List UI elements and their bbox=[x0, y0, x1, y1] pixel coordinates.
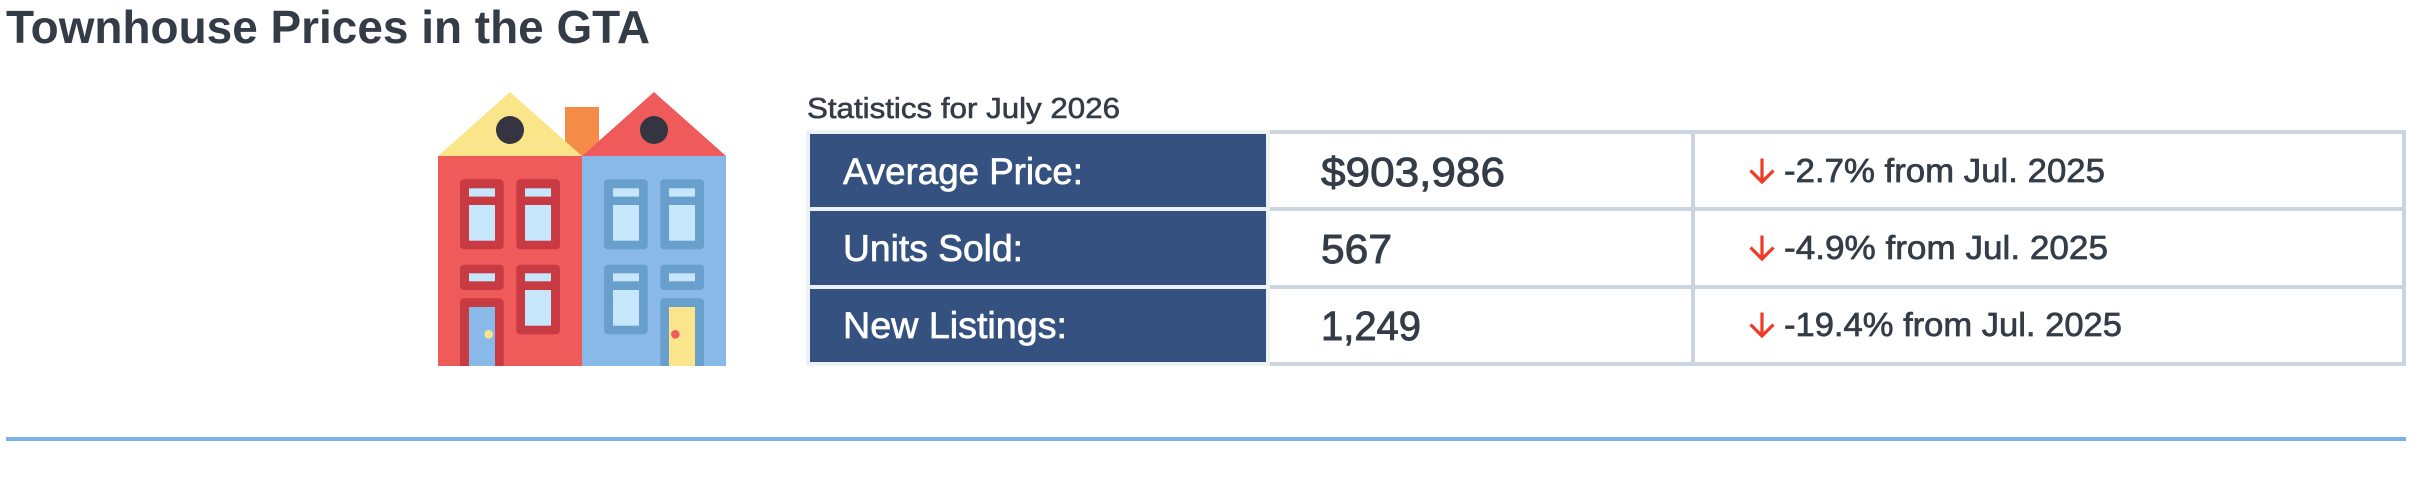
row: average price: -2.7% from Jul. 2025 bbox=[1784, 152, 2105, 189]
chimney bbox=[565, 107, 599, 156]
icon: two townhouses bbox=[438, 92, 726, 366]
attic window right bbox=[640, 116, 668, 144]
row: new listings bbox=[810, 289, 2122, 362]
table caption: Statistics for July 2026 bbox=[807, 93, 1120, 125]
row: average price: Average Price: bbox=[843, 151, 1083, 192]
red house body bbox=[438, 156, 582, 366]
statistics table bbox=[806, 130, 2406, 366]
row: new listings: 1,249 bbox=[1321, 303, 1421, 349]
row: average price: $903,986 bbox=[1321, 149, 1505, 195]
row: average price bbox=[810, 134, 2105, 207]
row: units sold: 567 bbox=[1321, 226, 1392, 272]
row: units sold: Units Sold: bbox=[843, 228, 1023, 269]
blue house body bbox=[582, 156, 726, 366]
divider line bbox=[6, 437, 2406, 441]
row: new listings: New Listings: bbox=[843, 305, 1067, 346]
attic window left bbox=[496, 116, 524, 144]
row: units sold bbox=[810, 211, 2108, 285]
yellow roof bbox=[438, 92, 582, 156]
row: new listings: -19.4% from Jul. 2025 bbox=[1784, 306, 2122, 343]
title: Townhouse Prices in the GTA bbox=[6, 1, 650, 53]
red roof bbox=[582, 92, 726, 156]
row: units sold: -4.9% from Jul. 2025 bbox=[1784, 229, 2108, 266]
